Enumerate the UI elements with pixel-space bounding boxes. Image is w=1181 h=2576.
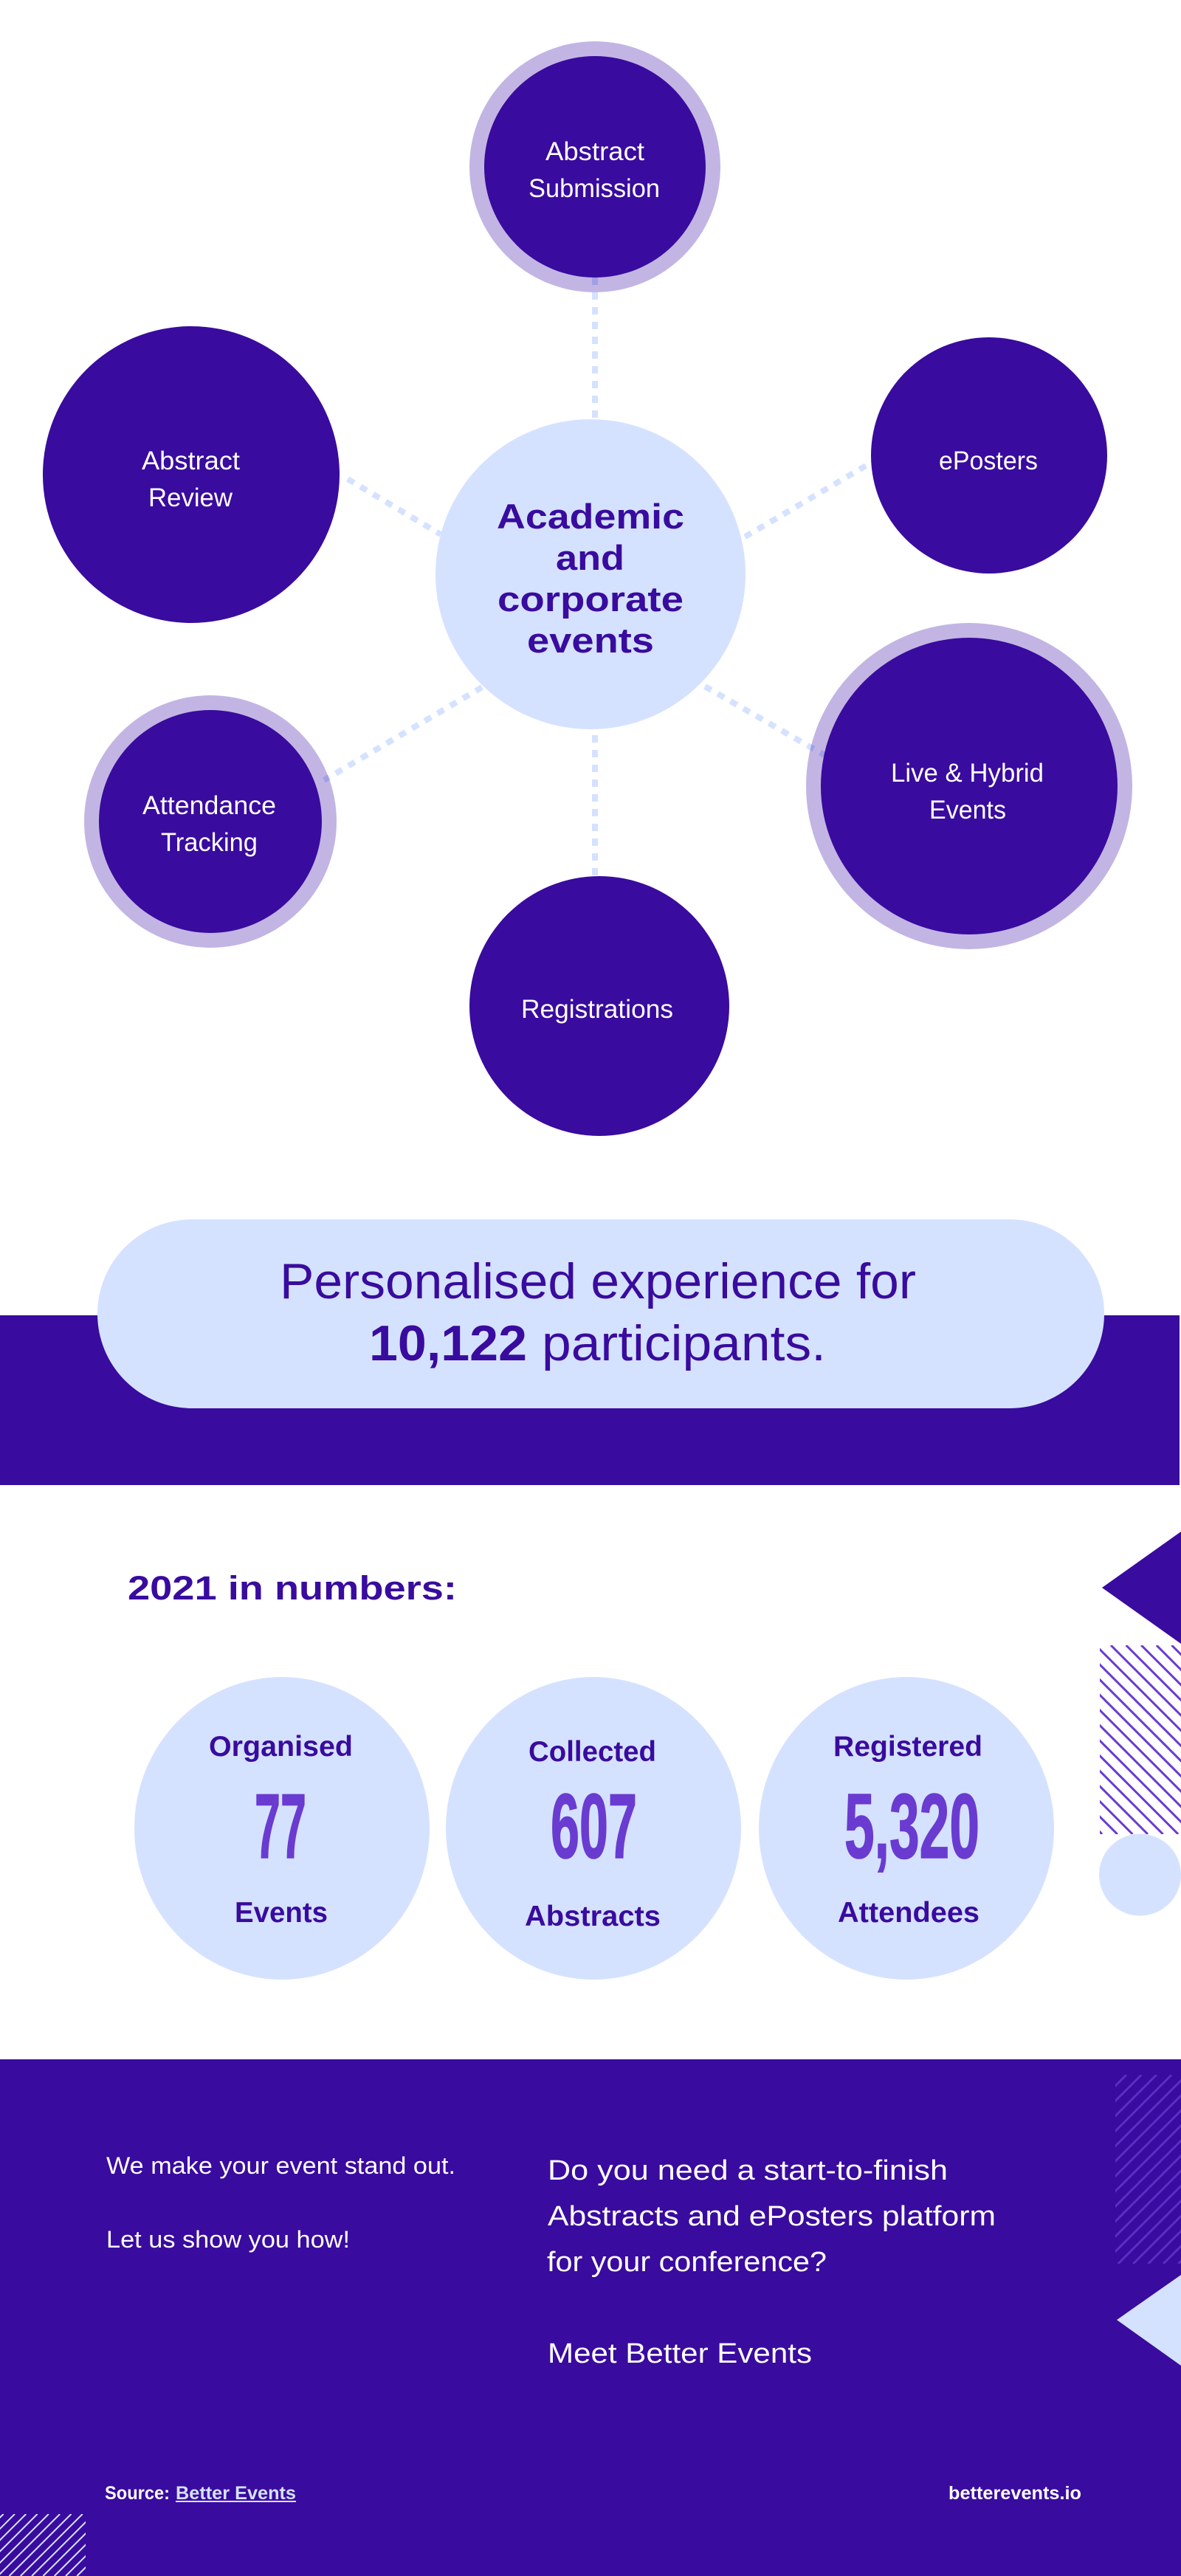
hub: Academic and corporate events: events [527, 621, 654, 660]
hub: Academic and corporate events: Academic [497, 497, 684, 536]
stat: Collected 607 Abstracts [446, 1677, 741, 1980]
footer panel [0, 2059, 1181, 2576]
footer text: right column: Meet Better Events [548, 2338, 812, 2369]
footer text: right column [547, 2155, 996, 2369]
stat: Collected 607 Abstracts: Collected [528, 1736, 656, 1768]
node: Live and Hybrid Events [806, 623, 1132, 949]
callout: personalised experience [97, 1219, 1104, 1408]
hub: Academic and corporate events: and [556, 538, 624, 577]
source line: Source: [105, 2483, 170, 2504]
node: Attendance Tracking: Tracking [161, 828, 258, 857]
footer text: left column: We make your event stand out. [106, 2152, 455, 2179]
footer hatch: bottom left [0, 2514, 86, 2576]
stat: Collected 607 Abstracts: 607 [551, 1776, 637, 1878]
callout: personalised experience: 10,122 [369, 1315, 527, 1371]
node: Live and Hybrid Events: Live & Hybrid [891, 759, 1044, 788]
footer text: right column: for your conference? [547, 2247, 827, 2278]
website: betterevents.io [948, 2483, 1081, 2504]
connectors: dashed spokes [324, 278, 866, 875]
stat: Organised 77 Events: Events [235, 1897, 328, 1929]
node: Attendance Tracking [84, 695, 337, 948]
decoration: hatched rectangle [1100, 1645, 1181, 1834]
heading: 2021 in numbers: 2021 in numbers: [128, 1569, 457, 1607]
node: Abstract Review: Abstract [142, 447, 240, 475]
footer triangle [1117, 2275, 1181, 2366]
hub: Academic and corporate events [435, 419, 746, 729]
stat: Registered 5,320 Attendees: Registered [833, 1731, 982, 1763]
stat: Registered 5,320 Attendees [759, 1677, 1054, 1980]
node: Abstract Review: Review [148, 483, 233, 512]
node: Live and Hybrid Events: Events [929, 796, 1006, 824]
node: Abstract Submission: Abstract [545, 137, 644, 166]
stat: Collected 607 Abstracts: Abstracts [525, 1901, 661, 1932]
diagram: event platform hub [43, 41, 1132, 1136]
callout: personalised experience: Personalised experience for [280, 1253, 916, 1309]
callout: personalised experience: participants. [542, 1315, 826, 1371]
stat: Registered 5,320 Attendees: Attendees [838, 1897, 979, 1929]
node: Abstract Submission [469, 41, 720, 292]
source line [105, 2483, 296, 2504]
source line: Better Events [176, 2483, 296, 2504]
stat: Organised 77 Events: 77 [255, 1776, 306, 1878]
node: Registrations: Registrations [521, 995, 673, 1024]
stat: Organised 77 Events [134, 1677, 430, 1980]
stat: Organised 77 Events: Organised [209, 1731, 353, 1763]
footer text: left column [106, 2152, 455, 2253]
node: ePosters: ePosters [939, 447, 1038, 475]
footer text: right column: Abstracts and ePosters platform [548, 2201, 996, 2232]
footer text: right column: Do you need a start-to-finish [548, 2155, 948, 2186]
node: Abstract Submission: Submission [528, 174, 660, 203]
decoration: dark triangle [1102, 1532, 1181, 1644]
footer text: left column: Let us show you how! [106, 2226, 350, 2253]
decoration: light circle [1099, 1833, 1181, 1916]
node: ePosters [871, 337, 1107, 574]
hub: Academic and corporate events: corporate [497, 579, 684, 619]
band: purple stripe behind callout [0, 1315, 1180, 1485]
stat: Registered 5,320 Attendees: 5,320 [844, 1776, 979, 1878]
node: Attendance Tracking: Attendance [142, 791, 276, 820]
footer hatch: top right [1115, 2075, 1181, 2264]
node: Registrations [469, 876, 729, 1136]
node: Abstract Review [43, 326, 340, 623]
